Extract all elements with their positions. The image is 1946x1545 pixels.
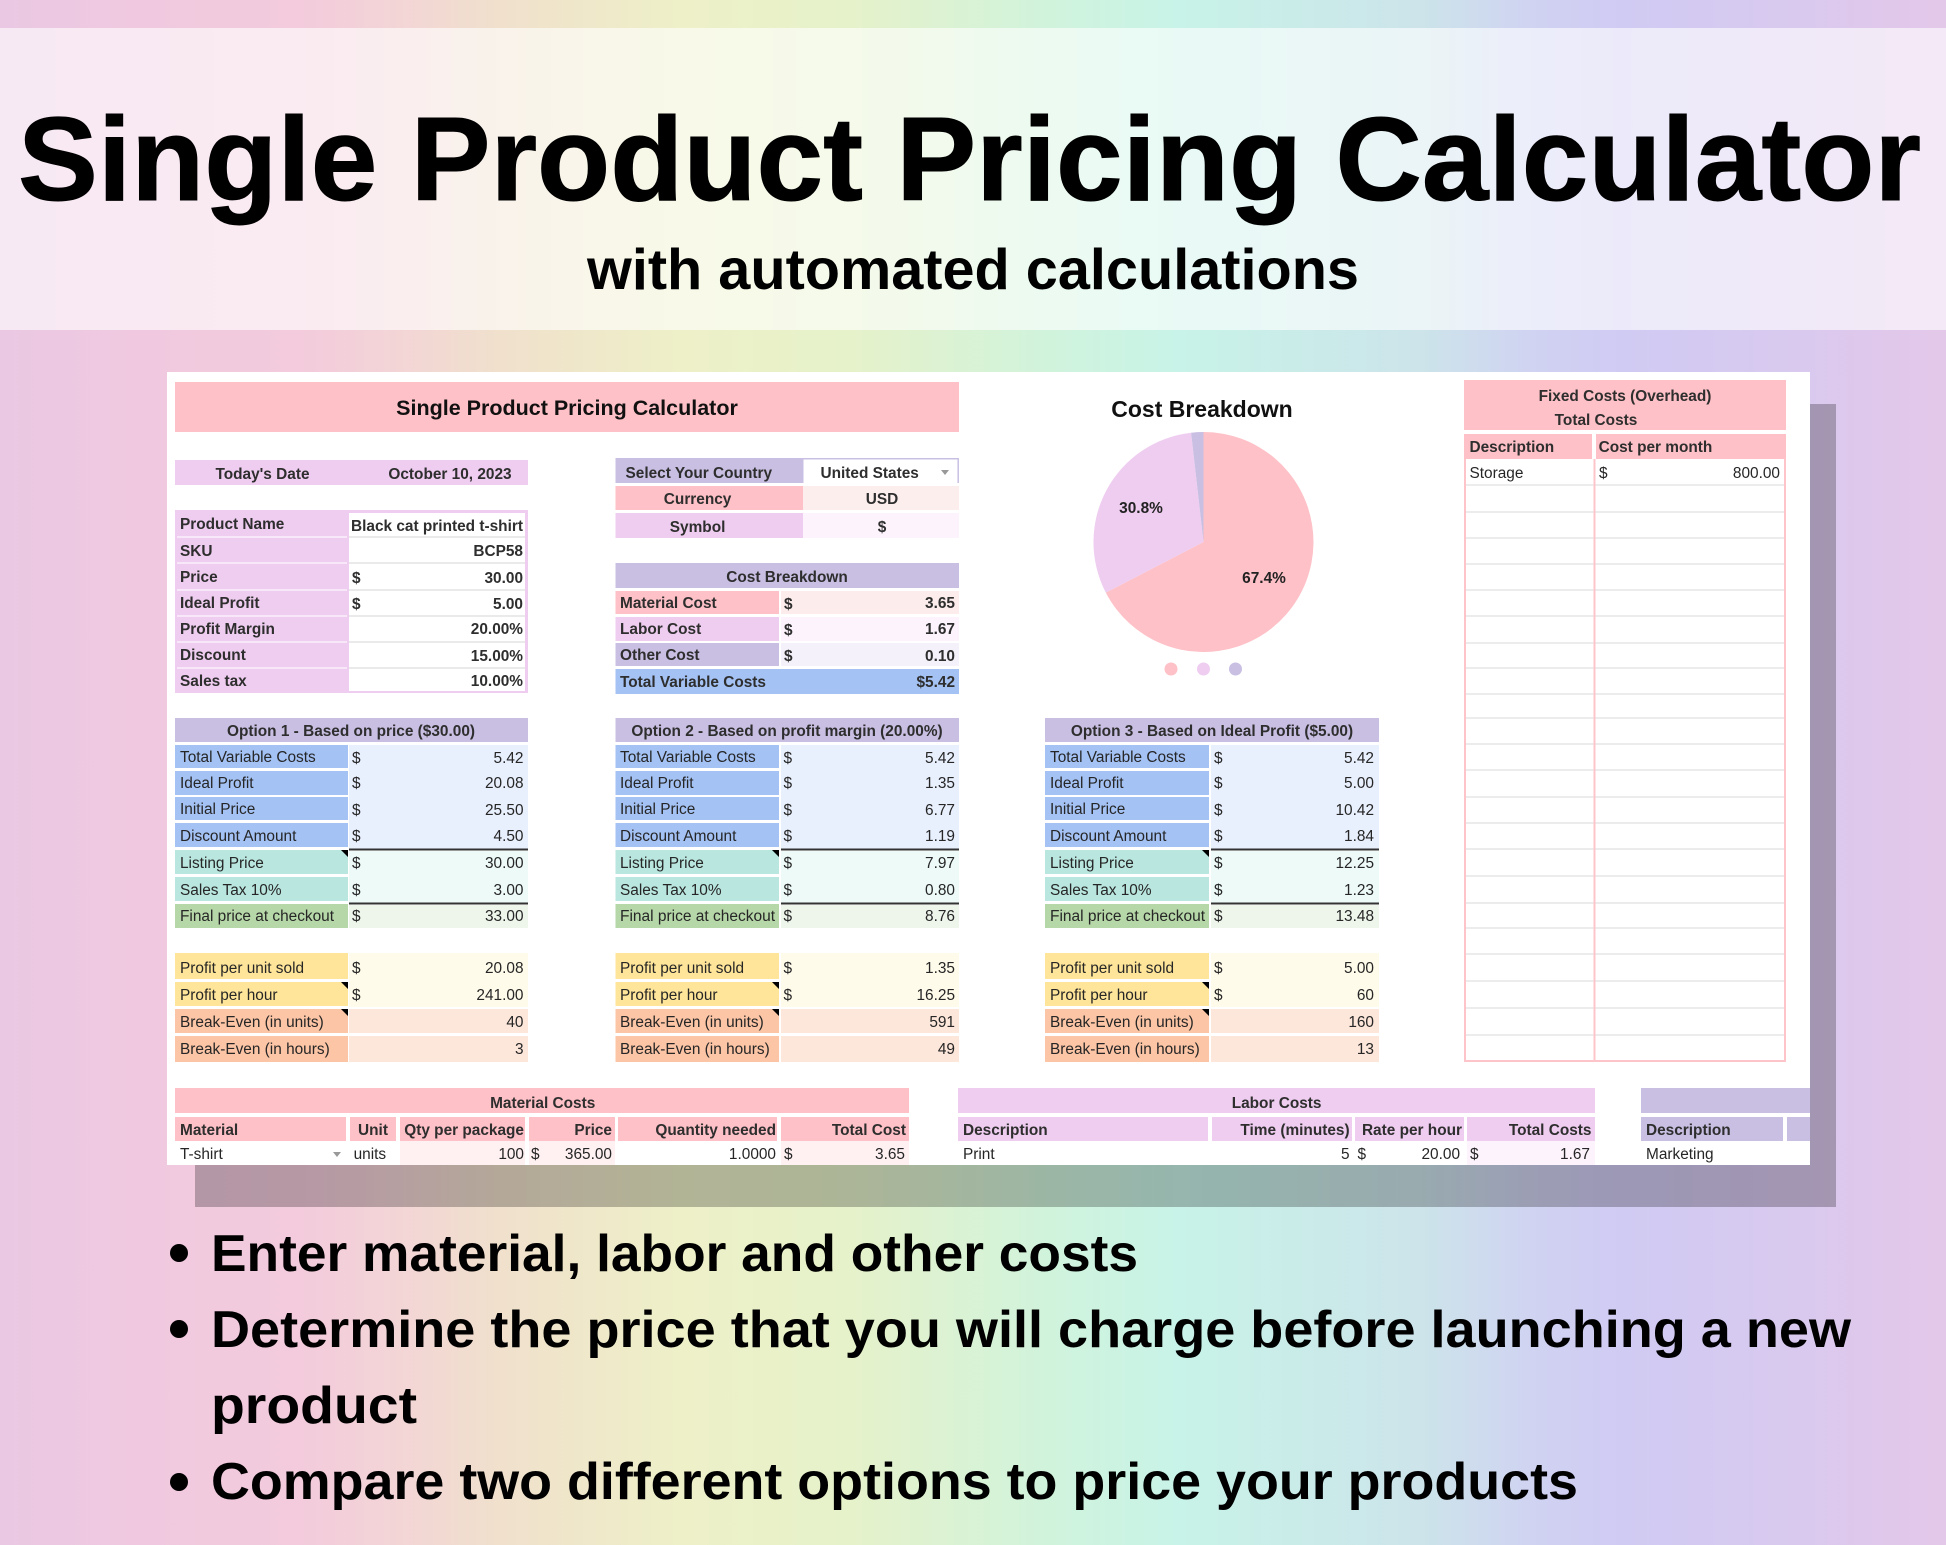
cost breakdown table: 1.67 bbox=[925, 621, 955, 638]
option 2 table: Break-Even (in hours) bbox=[620, 1041, 770, 1058]
pie label 30.8%: 30.8% bbox=[1119, 500, 1163, 517]
option 2 table: Total Variable Costs bbox=[620, 749, 756, 766]
sheet title banner: Single Product Pricing Calculator bbox=[396, 396, 738, 420]
labor costs table: 5 bbox=[1341, 1146, 1350, 1163]
option 2 table: 1.19 bbox=[925, 828, 955, 845]
option 3 table: Listing Price bbox=[1050, 855, 1134, 872]
pie chart: cost breakdown bbox=[1093, 396, 1313, 676]
material costs table: Quantity needed bbox=[655, 1122, 776, 1139]
product inputs table: 30.00 bbox=[484, 570, 523, 587]
material costs table: 100 bbox=[498, 1146, 524, 1163]
fixed costs table: Description bbox=[1470, 439, 1554, 456]
option 3 table: Profit per unit sold bbox=[1050, 960, 1174, 977]
fixed costs table: Fixed Costs (Overhead) bbox=[1539, 388, 1711, 405]
material costs table: Price bbox=[574, 1122, 612, 1139]
option 3 table: $ bbox=[1214, 987, 1223, 1004]
country selector: USD bbox=[866, 491, 898, 508]
material costs table: Material bbox=[180, 1122, 238, 1139]
labor costs table: $ bbox=[1470, 1146, 1479, 1163]
option 2 table: $ bbox=[784, 908, 792, 925]
option 3 table: Break-Even (in units) bbox=[1050, 1014, 1194, 1031]
cost breakdown table: Labor Cost bbox=[620, 621, 701, 638]
option 1 table: 20.08 bbox=[485, 775, 524, 792]
country selector: Select Your Country bbox=[626, 465, 772, 482]
product inputs table: 20.00% bbox=[471, 621, 523, 638]
material costs table: units bbox=[354, 1146, 386, 1163]
option 2 table: $ bbox=[784, 960, 792, 977]
option 2 table: $ bbox=[784, 987, 792, 1004]
option 3 table: Final price at checkout bbox=[1050, 908, 1206, 925]
option 3 table: 5.42 bbox=[1344, 750, 1374, 767]
bullet 2: Determine the price that you will charge before launching a new bbox=[211, 1301, 1852, 1359]
option 3 table: $ bbox=[1214, 750, 1223, 767]
option 1 table: Total Variable Costs bbox=[180, 749, 316, 766]
option 3 table: 12.25 bbox=[1335, 855, 1374, 872]
option 3 table: $ bbox=[1214, 908, 1223, 925]
material costs table: 1.0000 bbox=[729, 1146, 776, 1163]
option 3 table bbox=[1045, 718, 1379, 1062]
product inputs table: Discount bbox=[180, 647, 246, 664]
option 2 table: Profit per unit sold bbox=[620, 960, 744, 977]
material costs table: Qty per package bbox=[404, 1122, 524, 1139]
other costs table (cropped): Description bbox=[1646, 1122, 1731, 1139]
shadow behind spreadsheet bbox=[195, 404, 1836, 1207]
option 2 table: 5.42 bbox=[925, 750, 955, 767]
cost breakdown table: Total Variable Costs bbox=[620, 674, 766, 691]
option 1 table: Final price at checkout bbox=[180, 908, 335, 925]
option 2 table: Profit per hour bbox=[620, 987, 718, 1004]
labor costs table: Print bbox=[963, 1146, 995, 1163]
option 1 table: 30.00 bbox=[485, 855, 524, 872]
material costs table: Material Costs bbox=[490, 1095, 595, 1112]
sheet title banner bbox=[175, 382, 959, 432]
pie label 67.4%: 67.4% bbox=[1242, 570, 1286, 587]
legend dots bbox=[1164, 662, 1242, 676]
title: Single Product Pricing Calculator bbox=[18, 93, 1921, 226]
option 2 table: Break-Even (in units) bbox=[620, 1014, 764, 1031]
feature bullet list bbox=[170, 1225, 1852, 1511]
option 1 table: 5.42 bbox=[494, 750, 524, 767]
option 3 table: Sales Tax 10% bbox=[1050, 882, 1152, 899]
option 1 table: 20.08 bbox=[485, 960, 524, 977]
product inputs table: Price bbox=[180, 569, 218, 586]
option 3 table: Break-Even (in hours) bbox=[1050, 1041, 1200, 1058]
option 1 table: $ bbox=[352, 775, 361, 792]
option 1 table: 3 bbox=[515, 1041, 524, 1058]
fixed costs table: 800.00 bbox=[1733, 465, 1780, 482]
option 2 table: $ bbox=[784, 750, 792, 767]
product inputs table: Ideal Profit bbox=[180, 595, 260, 612]
option 3 table: 5.00 bbox=[1344, 960, 1374, 977]
option 3 table: $ bbox=[1214, 802, 1223, 819]
country selector: United States bbox=[820, 465, 919, 482]
date row: Today's Date bbox=[215, 466, 310, 483]
product inputs table: $ bbox=[352, 596, 361, 613]
material costs table: $ bbox=[784, 1146, 793, 1163]
other costs table (cropped): Marketing bbox=[1646, 1146, 1714, 1163]
option 2 table: 0.80 bbox=[925, 882, 955, 899]
option 2 table: $ bbox=[784, 882, 792, 899]
option 2 table: 1.35 bbox=[925, 775, 955, 792]
material costs table: 3.65 bbox=[875, 1146, 905, 1163]
option 2 table: 6.77 bbox=[925, 802, 955, 819]
option 1 table: Initial Price bbox=[180, 801, 255, 818]
product inputs table: Product Name bbox=[180, 516, 285, 533]
material costs table: 365.00 bbox=[565, 1146, 612, 1163]
option 2 table: 591 bbox=[929, 1014, 955, 1031]
option 1 table: 33.00 bbox=[485, 908, 524, 925]
labor costs table: 20.00 bbox=[1421, 1146, 1460, 1163]
product inputs table bbox=[175, 510, 528, 693]
fixed costs table: Total Costs bbox=[1555, 412, 1637, 429]
header band bbox=[0, 28, 1946, 330]
product inputs table: BCP58 bbox=[473, 543, 523, 560]
subtitle: with automated calculations bbox=[586, 238, 1359, 302]
option 1 table: Break-Even (in hours) bbox=[180, 1041, 330, 1058]
option 2 table: 49 bbox=[938, 1041, 955, 1058]
labor costs table: Labor Costs bbox=[1232, 1095, 1321, 1112]
option 1 table: 3.00 bbox=[494, 882, 524, 899]
option 1 table: Listing Price bbox=[180, 855, 264, 872]
option 2 table: $ bbox=[784, 775, 792, 792]
option 1 table bbox=[175, 718, 528, 1062]
option 2 table: 7.97 bbox=[925, 855, 955, 872]
bullet 1: Enter material, labor and other costs bbox=[211, 1225, 1138, 1283]
product inputs table: Sales tax bbox=[180, 673, 247, 690]
option 1 table: Sales Tax 10% bbox=[180, 882, 282, 899]
option 3 table: $ bbox=[1214, 775, 1223, 792]
option 3 table: 5.00 bbox=[1344, 775, 1374, 792]
cost breakdown table bbox=[616, 563, 959, 694]
cost breakdown table: $ bbox=[784, 648, 793, 665]
option 1 table: 25.50 bbox=[485, 802, 524, 819]
labor costs table: Rate per hour bbox=[1362, 1122, 1462, 1139]
material costs table: $ bbox=[531, 1146, 540, 1163]
option 2 table: Option 2 - Based on profit margin (20.00%) bbox=[631, 723, 943, 740]
cost breakdown table: Other Cost bbox=[620, 647, 700, 664]
product inputs table: 15.00% bbox=[471, 648, 523, 665]
option 2 table: $ bbox=[784, 855, 792, 872]
date row: October 10, 2023 bbox=[388, 466, 512, 483]
option 1 table: $ bbox=[352, 960, 361, 977]
option 2 table: Listing Price bbox=[620, 855, 704, 872]
option 3 table: 160 bbox=[1348, 1014, 1374, 1031]
other costs table (cropped) bbox=[1641, 1088, 1810, 1163]
option 3 table: 1.84 bbox=[1344, 828, 1374, 845]
option 1 table: $ bbox=[352, 882, 361, 899]
option 1 table: Ideal Profit bbox=[180, 775, 254, 792]
option 1 table: Profit per unit sold bbox=[180, 960, 304, 977]
bullet 3: Compare two different options to price your products bbox=[211, 1453, 1578, 1511]
option 1 table: 40 bbox=[506, 1014, 524, 1031]
option 3 table: 1.23 bbox=[1344, 882, 1374, 899]
labor costs table: Total Costs bbox=[1509, 1122, 1592, 1139]
option 1 table: $ bbox=[352, 828, 361, 845]
cost breakdown table: Cost Breakdown bbox=[726, 569, 848, 586]
cost breakdown table: 3.65 bbox=[925, 595, 955, 612]
pie slice: material 67.4% bbox=[1106, 432, 1313, 652]
option 1 table: $ bbox=[352, 802, 361, 819]
option 1 table: Discount Amount bbox=[180, 828, 297, 845]
option 3 table: 13.48 bbox=[1335, 908, 1374, 925]
spreadsheet screenshot bbox=[167, 372, 1810, 1165]
country selector: Symbol bbox=[670, 519, 725, 536]
material costs table bbox=[175, 1088, 909, 1165]
labor costs table: $ bbox=[1358, 1146, 1366, 1163]
option 1 table: $ bbox=[352, 908, 361, 925]
country selector bbox=[616, 458, 959, 538]
country selector: $ bbox=[878, 519, 887, 536]
cost breakdown table: $ bbox=[784, 622, 793, 639]
product inputs table: $ bbox=[352, 570, 361, 587]
fixed costs table bbox=[1464, 380, 1786, 1061]
material costs table: Total Cost bbox=[832, 1122, 906, 1139]
option 2 table: 1.35 bbox=[925, 960, 955, 977]
labor costs table: Description bbox=[963, 1122, 1048, 1139]
cost breakdown table: $5.42 bbox=[916, 674, 955, 691]
pie slice: labor 30.8% bbox=[1093, 433, 1204, 593]
option 3 table: 13 bbox=[1357, 1041, 1374, 1058]
option 3 table: 60 bbox=[1357, 987, 1374, 1004]
option 1 table: $ bbox=[352, 750, 361, 767]
cost breakdown table: $ bbox=[784, 596, 793, 613]
product inputs table: 5.00 bbox=[493, 596, 523, 613]
option 1 table: Break-Even (in units) bbox=[180, 1014, 324, 1031]
option 2 table: $ bbox=[784, 802, 792, 819]
product inputs table: Profit Margin bbox=[180, 621, 275, 638]
option 2 table: Initial Price bbox=[620, 801, 695, 818]
material costs table: T-shirt bbox=[180, 1146, 223, 1163]
pie slice: other 1.8% bbox=[1191, 432, 1204, 542]
country selector: Currency bbox=[664, 491, 732, 508]
option 3 table: Total Variable Costs bbox=[1050, 749, 1186, 766]
option 2 table bbox=[616, 718, 959, 1062]
product inputs table: SKU bbox=[180, 543, 212, 560]
bullet 2 bbox=[170, 1301, 1852, 1435]
option 2 table: Final price at checkout bbox=[620, 908, 776, 925]
option 3 table: Option 3 - Based on Ideal Profit ($5.00) bbox=[1071, 723, 1353, 740]
option 3 table: Discount Amount bbox=[1050, 828, 1167, 845]
option 1 table: 241.00 bbox=[476, 987, 524, 1004]
date row bbox=[175, 460, 528, 485]
option 3 table: $ bbox=[1214, 855, 1223, 872]
product inputs table: Black cat printed t-shirt bbox=[351, 518, 523, 535]
option 1 table: $ bbox=[352, 987, 361, 1004]
option 2 table: Ideal Profit bbox=[620, 775, 694, 792]
cost breakdown table: Material Cost bbox=[620, 595, 717, 612]
labor costs table: 1.67 bbox=[1560, 1146, 1590, 1163]
option 2 table: Discount Amount bbox=[620, 828, 737, 845]
option 3 table: Ideal Profit bbox=[1050, 775, 1124, 792]
option 1 table: Profit per hour bbox=[180, 987, 278, 1004]
labor costs table bbox=[958, 1088, 1595, 1165]
product inputs table: 10.00% bbox=[471, 673, 523, 690]
labor costs table: Time (minutes) bbox=[1240, 1122, 1350, 1139]
option 1 table: 4.50 bbox=[494, 828, 524, 845]
option 2 table: Sales Tax 10% bbox=[620, 882, 722, 899]
cost breakdown table: 0.10 bbox=[925, 648, 955, 665]
bullet 2: product bbox=[211, 1377, 417, 1435]
fixed costs table: $ bbox=[1599, 465, 1608, 482]
option 3 table: Initial Price bbox=[1050, 801, 1125, 818]
fixed costs table: Cost per month bbox=[1599, 439, 1712, 456]
option 3 table: $ bbox=[1214, 882, 1223, 899]
option 1 table: Option 1 - Based on price ($30.00) bbox=[227, 723, 475, 740]
option 1 table: $ bbox=[352, 855, 361, 872]
option 2 table: 16.25 bbox=[916, 987, 955, 1004]
fixed costs table: Storage bbox=[1470, 465, 1523, 482]
option 2 table: $ bbox=[784, 828, 792, 845]
option 3 table: 10.42 bbox=[1335, 802, 1374, 819]
option 3 table: $ bbox=[1214, 960, 1223, 977]
option 2 table: 8.76 bbox=[925, 908, 955, 925]
option 3 table: Profit per hour bbox=[1050, 987, 1148, 1004]
material costs table: Unit bbox=[358, 1122, 388, 1139]
chart title: Cost Breakdown bbox=[1111, 396, 1293, 422]
option 3 table: $ bbox=[1214, 828, 1223, 845]
